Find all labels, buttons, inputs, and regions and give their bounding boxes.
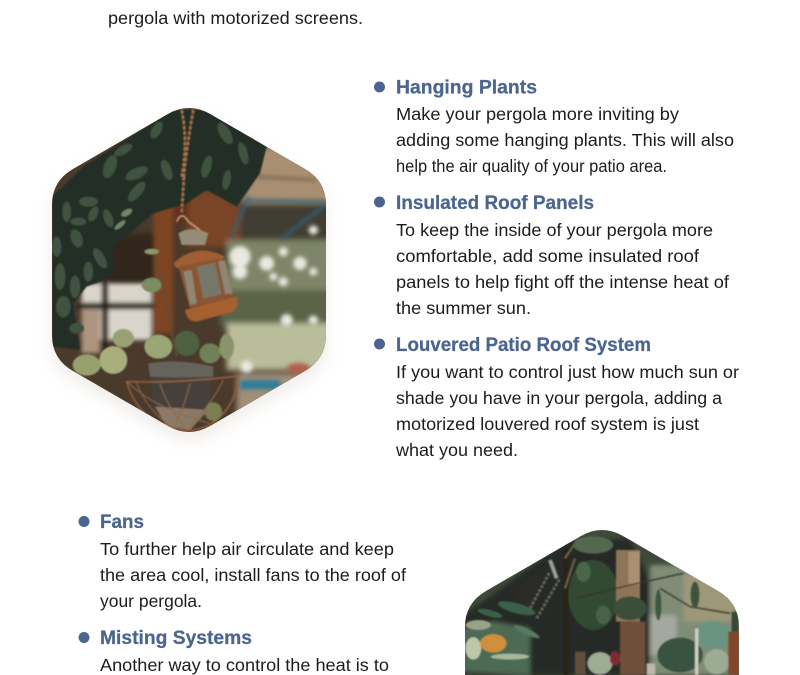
text: insulated roof panels: the summer sun. — [396, 298, 531, 318]
text: hanging plants: help the air quality of your patio area. — [396, 156, 667, 176]
bullet: hanging plants — [374, 82, 385, 92]
text: misting systems: Another way to control the heat is to — [100, 655, 389, 675]
bullet: fans — [78, 516, 90, 527]
photo: hanging lantern and plants in hexagon — [49, 108, 329, 442]
text: louvered patio roof system: If you want to control just how much sun or — [396, 362, 739, 382]
text: insulated roof panels: comfortable, add some insulated roof — [396, 246, 699, 266]
text: hanging plants: adding some hanging plants. This will also — [396, 130, 734, 150]
text: insulated roof panels — [396, 220, 729, 318]
heading: louvered patio roof system: Louvered Patio Roof System — [396, 334, 651, 356]
text: louvered patio roof system: shade you have in your pergola, adding a — [396, 388, 722, 408]
bullet: insulated roof panels — [374, 196, 385, 208]
foliage — [52, 110, 267, 430]
list: insulated roof panels — [374, 192, 729, 318]
basket — [148, 361, 213, 416]
lantern — [178, 229, 208, 245]
list: hanging plants — [374, 76, 734, 176]
text: insulated roof panels: panels to help fight off the intense heat of — [396, 272, 729, 292]
text: hanging plants: Make your pergola more inviting by — [396, 104, 679, 124]
list: louvered patio roof system — [374, 334, 739, 460]
text: fans: To further help air circulate and keep — [100, 539, 394, 559]
text: louvered patio roof system: motorized louvered roof system is just — [396, 414, 699, 434]
lower greens — [73, 354, 101, 376]
text: insulated roof panels: To keep the inside of your pergola more — [396, 220, 713, 240]
bullet: louvered patio roof system — [374, 338, 385, 350]
text: fans: your pergola. — [100, 591, 202, 611]
photo: garden pergola columns in hexagon — [465, 530, 739, 675]
text: fans: the area cool, install fans to the roof of — [100, 565, 406, 585]
list: misting systems — [78, 627, 389, 675]
chain — [182, 110, 193, 213]
bullet: misting systems — [78, 632, 90, 643]
heading: fans: Fans — [100, 511, 144, 533]
list: fans — [78, 511, 406, 611]
text: fans — [100, 539, 406, 611]
text: hanging plants — [396, 104, 734, 176]
heading: misting systems: Misting Systems — [100, 627, 252, 649]
text: louvered patio roof system: what you need. — [395, 440, 518, 460]
heading: hanging plants: Hanging Plants — [396, 76, 537, 98]
heading: insulated roof panels: Insulated Roof Panels — [396, 192, 594, 214]
text: louvered patio roof system — [395, 362, 739, 460]
intro text fragment: pergola with motorized screens. — [108, 8, 363, 28]
